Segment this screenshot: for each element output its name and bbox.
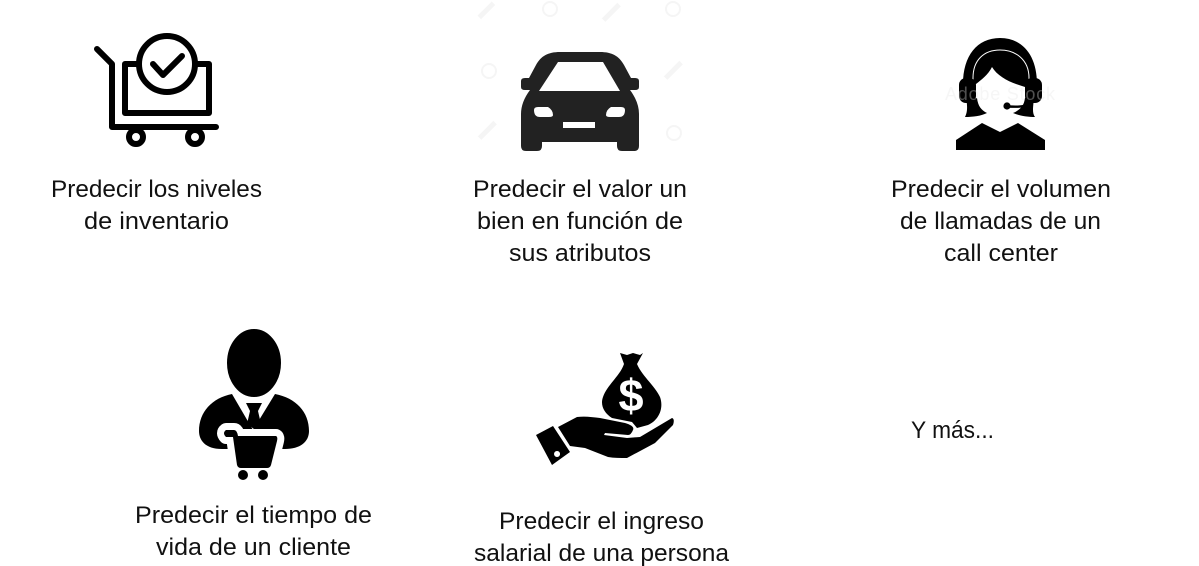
icon: car front bbox=[478, 2, 683, 151]
text: customer lifetime bbox=[135, 502, 372, 561]
text: salary: Predecir el ingreso bbox=[499, 508, 704, 535]
text: asset value: sus atributos bbox=[509, 240, 651, 267]
text: call volume bbox=[891, 176, 1111, 267]
text: call volume: call center bbox=[944, 240, 1058, 267]
text: inventory: de inventario bbox=[84, 208, 229, 235]
icon: cart with check mark bbox=[97, 36, 216, 144]
icon: businessman with shopping cart bbox=[199, 328, 309, 480]
faint stock watermark: Adobe Stock bbox=[945, 84, 1056, 104]
icon: hand holding money bag: $ bbox=[618, 370, 644, 421]
text: call volume: de llamadas de un bbox=[900, 208, 1101, 235]
text: inventory: Predecir los niveles bbox=[51, 176, 262, 203]
text: and more: Y más... bbox=[911, 417, 994, 444]
text: call volume: Predecir el volumen bbox=[891, 176, 1111, 203]
icon: hand holding money bag bbox=[536, 353, 674, 465]
text: inventory bbox=[51, 176, 262, 235]
watermark marks bbox=[478, 2, 683, 140]
text: customer lifetime: Predecir el tiempo de bbox=[135, 502, 372, 529]
text: asset value bbox=[473, 176, 687, 267]
text: customer lifetime: vida de un cliente bbox=[156, 534, 351, 561]
text: asset value: bien en función de bbox=[477, 208, 683, 235]
text: salary bbox=[474, 508, 729, 566]
icon: call center agent bbox=[945, 38, 1056, 150]
text: asset value: Predecir el valor un bbox=[473, 176, 687, 203]
